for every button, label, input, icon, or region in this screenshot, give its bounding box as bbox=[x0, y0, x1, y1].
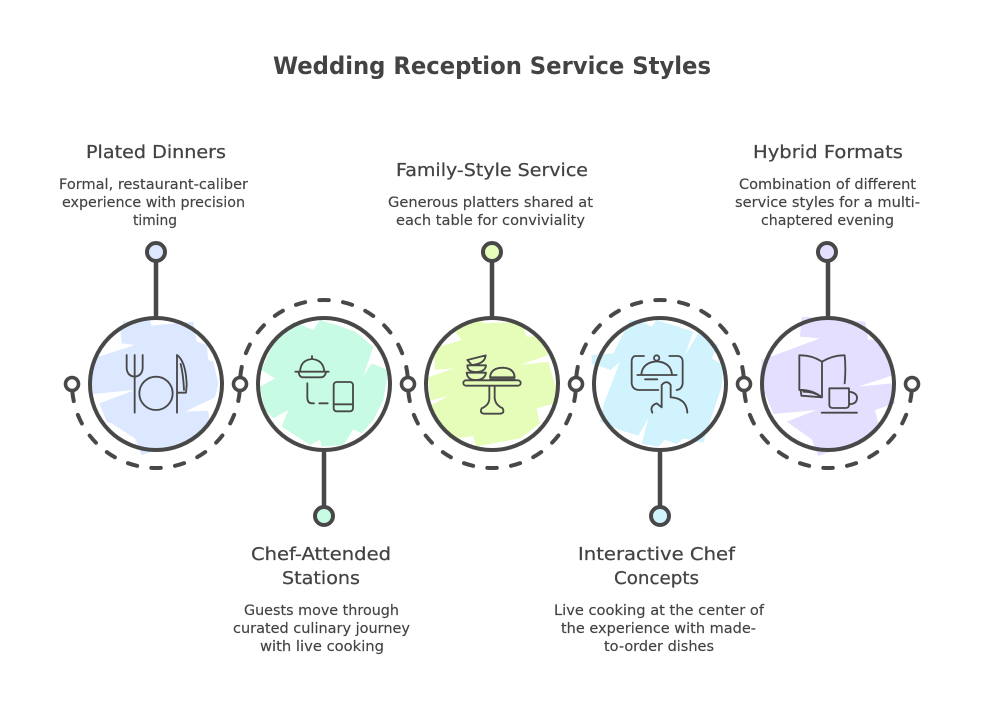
dashed arc: lower fifth bbox=[744, 384, 912, 468]
heading: Hybrid Formats bbox=[753, 142, 903, 163]
icon: cloche with frame and pointing hand bbox=[632, 355, 687, 413]
colour fill: blue bbox=[92, 320, 218, 455]
dashed arc: lower third bbox=[408, 384, 576, 468]
colour fill: cyan bbox=[592, 320, 723, 447]
description bbox=[735, 177, 920, 229]
description: Guests move through bbox=[244, 603, 399, 619]
timeline node 6 bbox=[906, 378, 918, 390]
heading: Chef-Attended bbox=[251, 544, 391, 565]
heading: Family-Style Service bbox=[396, 160, 588, 181]
description: curated culinary journey bbox=[233, 621, 410, 637]
description: service styles for a multi- bbox=[735, 195, 920, 211]
description: each table for conviviality bbox=[396, 213, 585, 229]
description: Live cooking at the center of bbox=[554, 603, 765, 619]
circle outline bbox=[258, 318, 390, 450]
circle outline bbox=[90, 318, 222, 450]
colour fill: lime bbox=[428, 317, 557, 447]
icon: plate with fork and knife bbox=[127, 355, 187, 413]
dashed arc: upper second bbox=[240, 300, 408, 384]
colour fill: green bbox=[260, 320, 388, 447]
timeline node 2 bbox=[234, 378, 246, 390]
description bbox=[388, 195, 594, 229]
title: Wedding Reception Service Styles bbox=[273, 52, 711, 80]
colour fill: purple bbox=[760, 317, 895, 456]
panel: interactive chef concepts bbox=[554, 318, 765, 655]
connector and dot bbox=[651, 450, 669, 525]
heading: Concepts bbox=[614, 568, 699, 589]
description: to-order dishes bbox=[604, 639, 714, 655]
description bbox=[554, 603, 765, 655]
icon: open menu and coffee cup bbox=[799, 355, 857, 413]
connector and dot bbox=[818, 243, 836, 318]
panel: chef-attended stations bbox=[233, 318, 410, 655]
dashed arc: upper fourth bbox=[576, 300, 744, 384]
connector and dot bbox=[147, 243, 166, 318]
timeline node 1 bbox=[66, 378, 78, 390]
description: Combination of different bbox=[739, 177, 917, 193]
circle outline bbox=[426, 318, 558, 450]
description bbox=[233, 603, 410, 655]
connector and dot bbox=[483, 243, 501, 318]
description: Generous platters shared at bbox=[388, 195, 594, 211]
timeline node 5 bbox=[738, 378, 750, 390]
icon: cloche, path and phone bbox=[295, 356, 353, 411]
heading: Interactive Chef bbox=[578, 544, 736, 565]
description: with live cooking bbox=[260, 639, 384, 655]
timeline node 3 bbox=[402, 378, 414, 390]
description bbox=[59, 177, 248, 229]
heading bbox=[251, 544, 391, 589]
description: experience with precision bbox=[62, 195, 245, 211]
circle outline bbox=[762, 318, 894, 450]
circle outline bbox=[594, 318, 726, 450]
panel: hybrid formats bbox=[735, 142, 920, 456]
icon: cake stand with bowls and dome bbox=[463, 355, 521, 414]
heading: Stations bbox=[282, 568, 360, 589]
timeline node 4 bbox=[570, 378, 582, 390]
description: chaptered evening bbox=[761, 213, 894, 229]
dashed arc: lower left bbox=[72, 384, 240, 468]
description: the experience with made- bbox=[561, 621, 756, 637]
panel: plated dinners bbox=[59, 142, 248, 455]
description: Formal, restaurant-caliber bbox=[59, 177, 248, 193]
connector and dot bbox=[315, 450, 333, 525]
heading bbox=[578, 544, 736, 589]
description: timing bbox=[133, 213, 177, 229]
panel: family-style service bbox=[388, 160, 594, 450]
heading: Plated Dinners bbox=[86, 142, 226, 163]
